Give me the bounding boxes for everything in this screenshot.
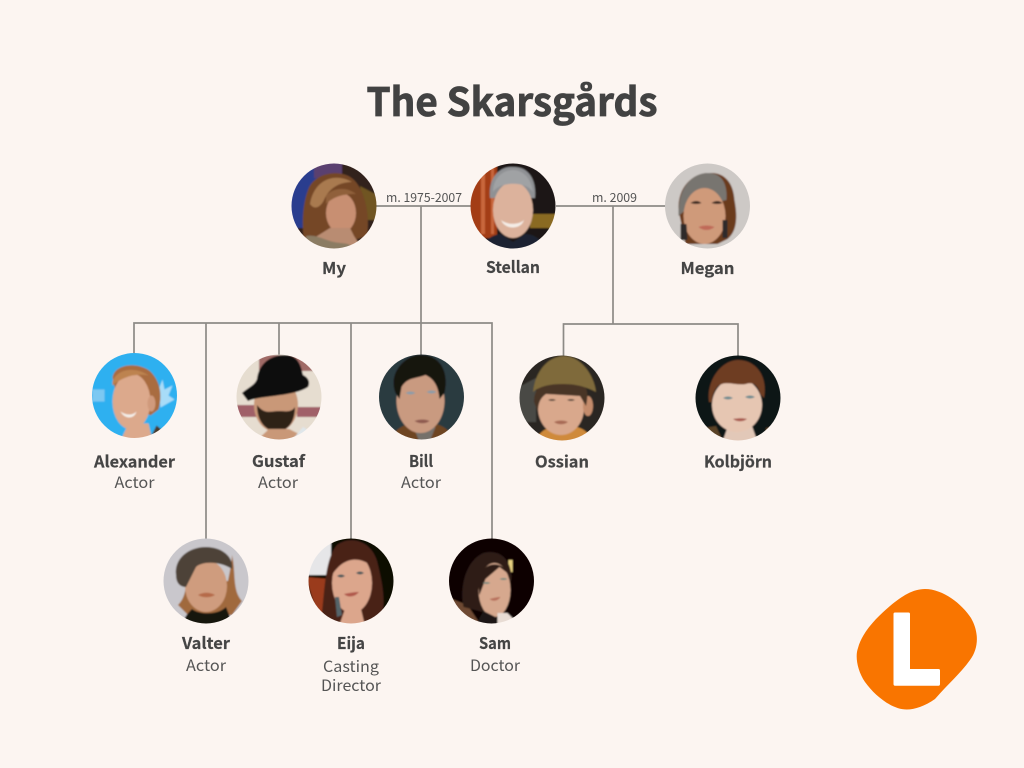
marriage label: My and Stellan: m. 1975-2007 xyxy=(386,187,462,206)
person: Alexander xyxy=(92,353,177,488)
logo: orange blob with letter L xyxy=(857,589,977,710)
role: Doctor: Doctor xyxy=(470,654,521,676)
person: Ossian xyxy=(520,356,604,468)
portrait: Bill xyxy=(379,354,464,440)
portrait: Eija xyxy=(308,538,394,624)
role: Actor: Actor xyxy=(114,471,156,493)
person: Sam xyxy=(449,538,534,671)
person: Bill xyxy=(379,354,464,488)
name: Bill: Bill xyxy=(409,448,433,472)
title: The Skarsgårds xyxy=(366,72,658,128)
name: Valter: Valter xyxy=(181,630,230,654)
role: Actor: Actor xyxy=(258,471,299,493)
role: Casting Director: Director xyxy=(321,674,382,696)
name: Gustaf: Gustaf xyxy=(252,448,306,472)
person: Megan xyxy=(662,161,752,279)
role: Actor: Actor xyxy=(401,471,442,493)
portrait: Valter xyxy=(164,538,248,624)
name: Alexander: Alexander xyxy=(93,448,175,472)
role: Casting Director xyxy=(321,655,382,696)
person: Stellan xyxy=(470,164,556,274)
portrait: Megan xyxy=(665,164,750,248)
name: Ossian: Ossian xyxy=(535,448,589,472)
portrait: Ossian xyxy=(520,356,604,440)
portrait: Sam xyxy=(449,538,534,624)
name: Sam: Sam xyxy=(479,630,511,654)
person: Valter xyxy=(164,538,248,671)
role: Actor: Actor xyxy=(186,654,227,676)
name: Megan: Megan xyxy=(680,255,734,279)
portrait: Kolbjörn xyxy=(696,356,780,440)
name: Eija: Eija xyxy=(337,630,365,654)
person: Kolbjörn xyxy=(693,353,783,472)
portrait: Stellan xyxy=(470,164,556,248)
portrait: My xyxy=(292,164,376,248)
person: My xyxy=(289,161,379,279)
person: Eija xyxy=(306,536,396,696)
role: Casting Director: Casting xyxy=(323,655,379,677)
name: Stellan: Stellan xyxy=(486,254,540,278)
name: Kolbjörn: Kolbjörn xyxy=(704,448,772,472)
marriage label: Stellan and Megan: m. 2009 xyxy=(592,187,637,206)
portrait: Gustaf xyxy=(236,354,322,440)
connector lines: family tree xyxy=(134,206,738,540)
name: My: My xyxy=(322,255,346,279)
portrait: Alexander xyxy=(92,353,177,438)
person: Gustaf xyxy=(236,354,322,488)
